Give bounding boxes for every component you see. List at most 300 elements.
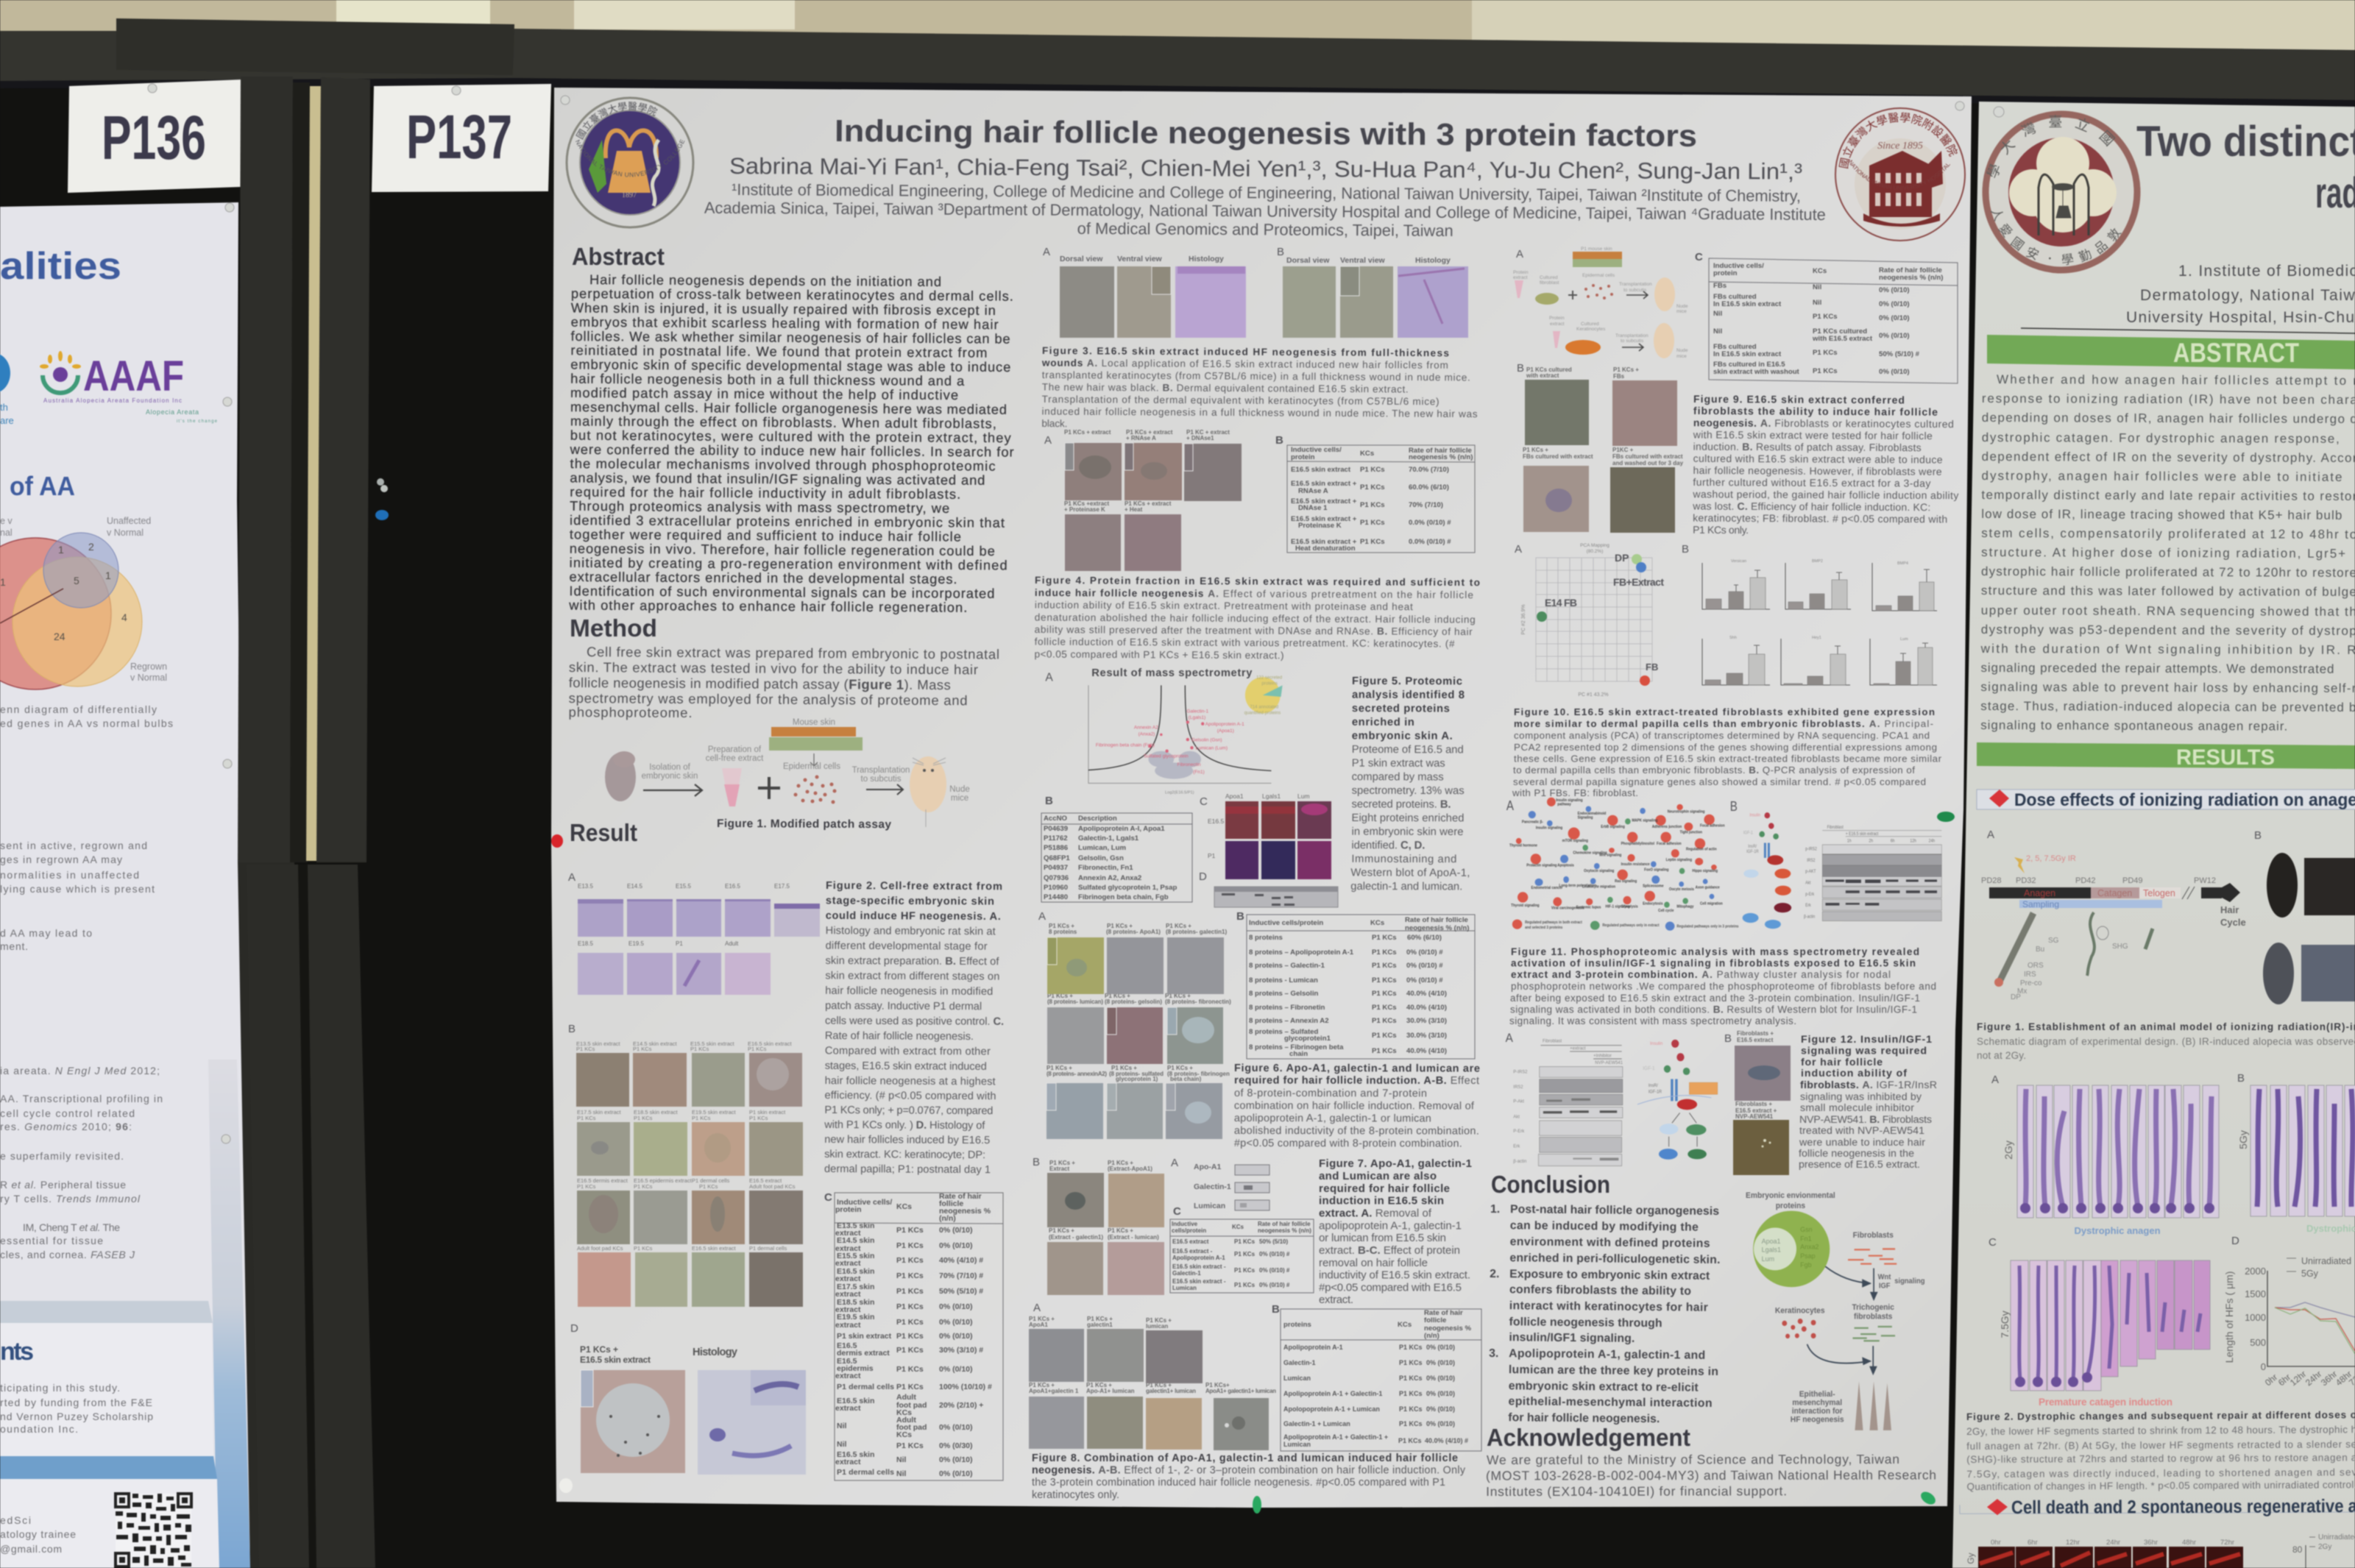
figure 7 panel C: table: E16.5 extract - [1172,1248,1213,1255]
right figure 2D: line chart: 0hr [2263,1372,2279,1388]
P137 number card: P137 [406,102,512,171]
figure 8 panel B: table: Lumican [1283,1441,1311,1448]
right figure 2D: line chart: 2000 [2245,1266,2266,1277]
figure 8 panel B: table: P1 KCs [1399,1405,1423,1413]
figure 2 caption: Figure 2. Cell-free extract from [826,880,1002,893]
figure 11 panel A: pathway cluster network: Long-term potentiation [1559,884,1596,888]
conclusion diagram: mechanism schematic: Anxa2 [1800,1243,1819,1251]
figure 11 panel A: pathway cluster network: HIF-1 signaling [1606,904,1630,909]
figure 11 panel B: signaling pathway and western blot: Erk [1805,904,1811,908]
right figure 2B: 5Gy histology strips: B [2237,1072,2245,1085]
figure 4 panel B: table: RNAse A [1298,487,1328,495]
text fragments: acknowledgements and contact [0,1382,153,1555]
text block: abstract: Through proteomics analysis with mass spectrometry, we [570,498,949,516]
right poster title fragment [2136,118,2355,217]
figure 2 panel A: histology strip: E18.5 [578,940,593,947]
figure 3: photos: Dorsal view [1060,255,1103,263]
figure 6 panel B: table: P1 KCs [1372,1017,1397,1025]
conclusion diagram: mechanism schematic: Wnt [1878,1273,1891,1282]
figure 8 panel A: photo grid: P1 KCs + [1087,1316,1113,1322]
figure 2 panel C: rate table: E13.5 skin [837,1221,874,1230]
figure 11 panel A: pathway cluster network: Cell cycle [1658,908,1674,913]
figure 2 panel B: wound photo grid: P1 KCs [634,1245,653,1252]
figure 2 panel B: wound photo grid: P1 KCs [577,1115,596,1121]
figure 12 caption: presence of E16.5 extract. [1799,1159,1920,1171]
right poster abstract text: structure. At higher dose of ionizing radiation, Lgr5+ [1981,545,2345,561]
figure 11 caption [1509,946,1936,1026]
figure 12 panel A: blot and pathway: NVP-AEW541 [1595,1060,1623,1065]
right figure 2 caption [1966,1409,2355,1492]
figure 10 panel B: bar charts: B [1682,543,1689,556]
text block: conclusion list: 2. [1490,1268,1499,1280]
figure 8 panel B: table [1272,1303,1481,1451]
figure 6 panel A: photo grid: (8 proteins- annexinA2) [1047,1071,1107,1077]
top frame bar [0,18,2355,107]
right figure 3: fluorescence image strip: 6hr [2028,1539,2038,1547]
figure 7 panel C: table: neogenesis % (n/n) [1258,1227,1311,1234]
figure 9 panel C: table: neogenesis % (n/n) [1879,274,1943,282]
text block: abstract: follicles. We ask whether similar neogenesis of hair follicles can be [571,328,1010,347]
figure 11 caption: activation of insulin/IGF-1 signaling in fibroblasts exposed to E16.5 skin [1511,958,1916,968]
right figure 2 caption: 2Gy, the lower HF segments started to shrink from 12 to 48 hours. The dystrophic h [1966,1424,2355,1437]
figure 7 panel C: table [1170,1205,1314,1293]
figure 7 panel C: table: cells/protein [1172,1227,1206,1234]
figure 12 panel B: photos: NVP-AEW541 [1735,1113,1774,1120]
figure 5 panel B: protein table: Gelsolin, Gsn [1078,854,1124,862]
figure 2 panel C: rate table: extract [835,1290,861,1299]
figure 6 panel A: photo grid: (8 proteins- galectin1) [1166,929,1227,935]
text block: conclusion list: embryonic skin extract to re-elicit [1509,1380,1699,1394]
text fragments: acknowledgements and contact: rted by funding from the F&E [0,1397,152,1408]
figure 8 panel B: table: 40.0% (4/10) # [1425,1437,1468,1444]
figure 2 panel C: rate table: Rate of hair [939,1192,982,1201]
figure 2 panel C: rate table: P1 KCs [896,1318,924,1327]
figure 11 panel A: pathway cluster network: Neurotrophin signaling [1668,809,1705,815]
figure 8 panel B: table: P1 KCs [1399,1359,1423,1366]
figure 5 caption: Proteome of E16.5 and [1352,744,1464,756]
logo: NTU college of medicine [565,96,695,230]
figure 9 caption: further cultured without E16.5 extract for a 3-day [1693,476,1930,489]
figure 11 panel A: pathway cluster network: Mitophagy [1676,904,1694,909]
figure 8 panel B: table: Apolopoprotein A-1 + Lumican [1283,1405,1380,1413]
figure 11 panel B: signaling pathway and western blot: 1h [1847,839,1852,844]
figure 2 caption: skin extract from different stages on [825,970,999,983]
right figure 2D: line chart: 36hr [2319,1369,2339,1388]
figure 5 panel A: volcano plot and pie: proteins [1261,681,1278,687]
right poster abstract text: low dose of IR, lineage tracing showed that K5+ hair bulb [1981,507,2342,522]
figure 9 panel A: patch assay schematic: Transplantation [1615,333,1648,338]
logo: AAAF: AAAF [83,352,184,400]
right figure 1: experimental design: Cycle [2220,917,2246,928]
text block: abstract: mainly through the effect on fibroblasts. When adult fibroblasts, [570,413,996,431]
figure 7 panel B: photos: P1 KCs + [1049,1227,1074,1234]
figure 4 panel A: photos: P1 KCs + extract [1125,500,1172,507]
figure 9 panel A: patch assay schematic: to subcutis [1623,288,1647,293]
figure 2 panel B: wound photo grid: E16.5 skin extract [748,1040,793,1047]
figure 11 panel A: pathway cluster network: Signaling [1578,815,1593,820]
right figure 1: experimental design: Catagen [2097,888,2132,898]
text block: abstract: hair follicle neogenesis both in a full thickness wound and a [570,371,965,389]
figure 5 panel B: protein table: Sulfated glycoprotein 1, Psap [1078,884,1177,892]
logo: National Taiwan University [1981,110,2142,274]
figure 2 panel B: wound photo grid: P1 KCs [634,1183,653,1190]
figure 11 panel B: signaling pathway and western blot: + E16.5 skin extract [1846,832,1879,837]
figure 5 panel B: protein table: B [1045,795,1053,807]
figure 12 panel A: blot and pathway: β-actin [1513,1159,1527,1164]
right figure 2D: line chart: 0 [2261,1361,2266,1372]
figure 5 panel B: protein table: P04639 [1044,825,1068,833]
figure 7 panel C: table: Inductive [1172,1221,1198,1227]
figure 3: photos: Ventral view [1117,255,1163,263]
right figure 2D: line chart: Unirradiated [2301,1256,2351,1266]
figure 2 panel C: rate table: E14.5 skin [837,1236,874,1245]
figure 5 panel A: volcano plot and pie: Fibronectin [1178,762,1201,767]
figure 3: photos: Ventral view [1340,256,1386,265]
right figure 2D: line chart: 24hr [2303,1369,2323,1388]
text block: abstract: embryonic skin of specific developmental stage was able to induce [570,356,1010,375]
figure 4 panel B: table [1275,434,1475,553]
figure 11 panel B: signaling pathway and western blot: 12h [1910,839,1916,844]
figure 5 caption: Eight proteins enriched [1352,812,1465,824]
figure 5 caption: Immunostaining and [1351,854,1456,865]
figure 2 panel B: wound photo grid: P1 skin extract [749,1109,786,1115]
right figure 2D: line chart: 48hr [2334,1369,2354,1388]
figure 6 panel A: photo grid: 8 proteins [1049,929,1077,935]
figure 12 panel A: blot and pathway: +extract [1570,1046,1586,1051]
figure 4 caption: p<0.05 compared with P1 KCs + E16.5 skin extract.) [1034,648,1284,661]
figure 6 caption: of 8-protein-combination and 7-protein [1234,1088,1427,1099]
text block: acknowledgement: Institutes (EX104-10410EI) for financial support. [1486,1483,1787,1499]
figure 5 caption: embryonic skin A. [1352,730,1453,742]
heading: acknowledgements fragment: nts [0,1338,34,1366]
figure 8 panel B: table: 0% (0/10) [1426,1359,1455,1366]
right figure 2C: 7.5Gy histology strips: C [1989,1236,1997,1249]
P136 number card: P136 [102,103,206,172]
right figure 2D: line chart: D [2231,1235,2239,1247]
figure 6 panel B: table: 8 proteins – Fibronetin [1249,1004,1325,1012]
figure 2 caption: could induce HF neogenesis. A. [826,910,1001,923]
figure 4 panel B: table: P1 KCs [1360,501,1385,509]
authors: Sabrina Mai-Yi Fan¹, Chia-Feng Tsai², Chien-Mei Yen¹,³, Su-Hua Pan⁴, Yu-Ju Chen², Sung-Jan Lin¹,³ [729,153,1802,185]
figure 2 panel A: histology strip: E15.5 [676,883,691,890]
right figure 1: experimental design: IRS [2024,971,2036,979]
right poster abstract banner [1987,335,2355,369]
text block: abstract: reinitiated in postnatal life. We found that protein extract from [570,342,988,361]
figure 9 panel B: photos: P1 KCs cultured [1526,366,1572,373]
figure 11 panel A: pathway cluster network: Axon guidance [1696,885,1720,890]
text block: acknowledgement [1486,1452,1936,1499]
figure 6 panel B: table: 8 proteins – Gelsolin [1249,990,1319,998]
figure 9 panel A: patch assay schematic: P1 mouse skin [1581,246,1612,252]
figure 11 panel B: signaling pathway and western blot: Akt [1805,881,1811,886]
figure 2 panel B: wound photo grid: E15.5 skin extract [690,1040,735,1047]
figure 6 panel A: photo grid: glycoprotein 1) [1116,1076,1158,1082]
chart: venn diagram: 24 [54,631,65,642]
figure 5 caption: Western blot of ApoA-1, [1350,867,1470,879]
P137 number card [372,84,551,192]
caption: figure 1: Figure 1. Modified patch assay [717,817,891,831]
right figure 2C: 7.5Gy histology strips: Premature catagen induction [2039,1397,2172,1408]
right figure 1: experimental design: SHG [2112,943,2128,951]
figure 2 panel B: wound photo grid: P1 KCs [748,1046,767,1052]
figure 8 panel B: table: follicle [1424,1316,1446,1324]
text fragments: venn caption and conclusions: cell cycle control related [0,1107,135,1119]
right poster abstract text: dystrophy, anagen hair follicles were able to initiate [1981,469,2342,484]
text block: abstract: but not keratinocytes, were cultured with the protein extract, they [570,428,1012,445]
figure 3: photos: Histology [1415,256,1451,265]
figure 2 panel C: rate table: 0% (0/10) [939,1365,973,1374]
figure 2 caption: skin extract. KC: keratinocyte; DP: [824,1149,985,1161]
text block: abstract: mesenchymal cells. Hair follicle organogenesis here was mediated [570,399,1007,417]
figure 11 panel B: signaling pathway and western blot: 2h [1869,839,1873,844]
figure 9 panel C: table: P1 KCs [1813,313,1838,321]
figure 6 panel B: table: 8 proteins – Galectin-1 [1249,962,1325,970]
figure 3 caption: transplanted keratinocytes (from C57BL/6 mice) in a full thickness wound in nude mice. [1042,369,1470,383]
icon: epidermal cells [793,776,836,803]
figure 6 panel B: table: 8 proteins [1249,934,1283,942]
figure 12 panel B: photos: Fibroblasts + [1737,1030,1774,1037]
figure 7 caption: apolipoprotein A-1, galectin-1 [1319,1220,1462,1232]
figure 7 panel C: table: E16.5 skin extract - [1172,1278,1226,1285]
figure 6 panel B: table: 8 proteins - Lumican [1249,976,1318,985]
figure 2 caption: efficiency. (# p<0.05 compared with [824,1090,996,1102]
figure 4 panel A: photos: + DNAse1 [1186,435,1214,441]
figure 9 panel A: patch assay schematic: Cultured [1581,322,1599,327]
figure 2 caption: different developmental stage for [826,940,988,953]
right figure 1: experimental design: PW12 [2194,876,2216,885]
figure 9 caption: hair follicle neogenesis. However, if fibroblasts were [1693,464,1942,478]
right figure 1 caption: Figure 1. Establishment of an animal model of ionizing radiation(IR)-in [1977,1021,2355,1032]
text block: abstract: identified 3 extracellular proteins enriched in embryonic skin that [570,512,1005,531]
figure 2 panel D: hair follicle photo and histology: E16.5 skin extract [580,1355,651,1365]
figure 11 panel A: pathway cluster network: Thyroid signaling [1511,904,1540,908]
figure 2 panel C: rate table: neogenesis % [939,1207,991,1216]
text block: abstract: embryos that exhibit scarless healing with formation of new hair [571,314,999,332]
figure 11 panel B: signaling pathway and western blot: 24h [1929,839,1935,844]
figure 5 panels C and D: immunostaining and western blot: Apoa1 [1225,792,1244,800]
right figure 1: experimental design: A [1987,829,1994,841]
figure 2 panel C: rate table: protein [835,1205,862,1214]
right figure 2A: 2Gy histology strips: 2Gy [2002,1140,2014,1160]
right poster abstract text: dystrophy was p53-dependent and the severity of dystrop [1981,622,2355,638]
figure 2 caption: dermal papilla; P1: postnatal day 1 [824,1163,991,1176]
figure 9 panel A: patch assay schematic: fibroblast [1540,280,1559,285]
figure 2 panel C: rate table: (n/n) [939,1214,956,1223]
figure 4 panel B: table: E16.5 skin extract + [1291,480,1357,488]
figure 9 panel C: table: 0% (0/10) [1879,314,1910,322]
figure 11 panel A: pathway cluster network: Hippo signaling [1692,869,1718,873]
text block: acknowledgement: We are grateful to the Ministry of Science and Technology, Taiwan [1487,1452,1899,1467]
figure 4 panel B: table: E16.5 skin extract + [1291,497,1357,505]
figure 4 panel B: table: 60.0% (6/10) [1409,483,1449,492]
figure 5 panel A: volcano plot and pie: Result of mass spectrometry [1091,667,1253,679]
figure 6 panel B: table: Rate of hair follicle [1405,916,1468,924]
figure 4 panel B: table: P1 KCs [1360,538,1385,546]
text block: conclusion list: enriched in peri-folliculogenetic skin. [1509,1252,1720,1266]
figure 10 panel B: bar charts: Hey1 [1812,636,1821,640]
figure 2 panel C: rate table: 0% (0/10) [939,1469,973,1478]
figure 5 panels C and D: immunostaining and western blot: Lgals1 [1262,792,1281,800]
figure 7 caption: required for hair follicle [1319,1182,1450,1195]
figure 11 panel A: pathway cluster network: ErbB signaling [1601,825,1625,829]
figure 9 panel A: patch assay schematic: Keratinocytes [1576,327,1606,332]
figure 4 panel B: table: protein [1291,453,1315,461]
right figure 2D: line chart: 1500 [2245,1288,2266,1299]
figure 5 caption: secreted proteins [1352,703,1450,715]
figure 5 panels C and D: immunostaining and western blot [1199,792,1338,907]
figure 7 panel C: table: 0% (0/10) # [1259,1251,1290,1257]
figure 8 panel A: photo grid: P1 KCs + [1086,1382,1112,1388]
heading fragment: alities [0,245,121,288]
figure 5 panel A: volcano plot and pie: Apolipoprotein A-1 [1205,722,1244,727]
figure 7 panel C: table: Rate of hair follicle [1258,1221,1311,1227]
figure 7 panel C: table: KCs [1232,1224,1244,1230]
right poster abstract text: stem cells, compensatorily proliferated at 12 to 48hr to [1981,526,2355,542]
figure 6 panel A: photo grid: (8 proteins- lumican) [1047,998,1103,1005]
conclusion diagram: mechanism schematic: Keratinocytes [1775,1306,1825,1316]
figure 11 panel B: signaling pathway and western blot: IGF-1R [1746,850,1759,854]
figure 9 panel C: table: FBs [1713,282,1727,290]
figure 11 panel A: pathway cluster network: MAPK signaling [1632,818,1657,823]
figure 2 panel C: rate table: 40% (4/10) # [939,1256,983,1265]
figure 2 panel B: wound photo grid: E16.5 extract [749,1177,782,1184]
figure 6 panel B: table: 0% (0/10) # [1406,948,1443,957]
figure 2 panel B: wound photo grid: E16.5 skin extract [692,1245,737,1252]
figure 10 caption: several dermal papilla signature genes also showed a similar trend. # p<0.05 compared [1513,776,1926,787]
figure 8 panel A: photo grid: P1 KCs+ [1205,1382,1230,1388]
figure 10 caption [1512,706,1942,798]
figure 5 panel B: protein table: Fibronectin, Fn1 [1078,864,1133,872]
figure 2 panel C: rate table: P1 skin extract [837,1332,892,1341]
figure 2 panel C: rate table: P1 KCs [896,1256,924,1265]
text block: conclusion list: insulin/IGF1 signaling. [1509,1331,1635,1345]
icon: plus [758,777,780,799]
right poster abstract text: depending on doses of IR, anagen hair follicles undergo d [1982,411,2355,426]
figure 4 caption: Figure 4. Protein fraction in E16.5 skin extract was required and sufficient to [1035,575,1480,588]
figure 6 panel B: table: 30.0% (3/10) [1406,1017,1447,1025]
text block: method [568,644,999,723]
figure 6 panel A: photo grid: (8 proteins- fibrinogen [1167,1071,1230,1077]
right figure 1: experimental design: Hair [2220,904,2239,915]
figure 11 panel A: pathway cluster network: Insulin resistance [1621,862,1650,867]
wall background [0,0,2355,103]
figure 10 panel A: PCA scatter: PC #2 36.9% [1521,604,1526,635]
right figure 2D: line chart: 12hr [2288,1369,2308,1388]
figure 8 panel B: table: Galectin-1 [1283,1359,1316,1366]
right figure 3: fluorescence image strip [1966,1539,2243,1568]
right figure 3: fluorescence image strip: 0hr [1991,1539,2001,1547]
text fragments: venn caption and conclusions: ges in regrown AA may [0,854,122,865]
figure 9 panel C: table: Inductive cells/ [1713,262,1764,270]
figure 2 panel C: rate table: KCs [896,1430,912,1439]
figure 4 panel B: table: E16.5 skin extract [1291,466,1351,474]
arrow: transplantation [852,766,910,795]
figure 2 panel C: rate table: P1 KCs [896,1302,924,1311]
title: Inducing hair follicle neogenesis with 3 protein factors [835,113,1697,153]
figure 11 panel B: signaling pathway and western blot: 6h [1891,839,1895,844]
figure 2 caption [824,880,1005,1176]
right figure 2A: 2Gy histology strips: Dystrophic anagen [2074,1225,2161,1236]
figure 7 panel C: table: P1 KCs [1234,1251,1256,1257]
figure 10 caption: more similar to dermal papilla cells than embryonic fibroblasts. A. Principal- [1514,718,1933,729]
right poster abstract text: dystrophic catagen. For dystrophic anagen response, [1982,430,2340,446]
figure 9 panel C: table: skin extract with washout [1713,368,1800,376]
figure 4 panel B: table: 0.0% (0/10) # [1409,538,1451,546]
figure 11 caption: extract and 3-protein combination. A. Pathway cluster analysis for nodal [1511,969,1891,980]
figure 10 panel B: bar charts: BMP2 [1812,559,1823,564]
figure 4 panel A: photos: + RNAse A [1126,435,1156,441]
conclusion diagram: mechanism schematic: Fibroblasts [1853,1231,1894,1240]
heading: Abstract: Abstract [572,243,665,270]
figure 2 panel C: rate table: P1 dermal cells [837,1468,894,1477]
figure 2 panel C: rate table: 0% (0/10) [939,1332,973,1341]
figure 4 panel A: photos: P1 KCs +extract [1064,500,1109,507]
figure 5 caption: secreted proteins. B. [1352,798,1451,811]
figure 10 panel A: PCA scatter: FB+Extract [1613,576,1664,588]
text block: conclusion list: Post-natal hair follicle organogenesis [1510,1203,1719,1218]
figure 7 caption: inductivity of E16.5 skin extract. [1319,1269,1470,1282]
figure 9 panel C: table: P1 KCs [1813,349,1838,357]
figure 2 panel C: rate table: 0% (0/30) [939,1441,973,1450]
figure 7 caption: extract. A. Removal of [1319,1207,1432,1220]
figure 5 caption: Figure 5. Proteomic [1352,675,1462,687]
text block: abstract: together were required and sufficient to induce hair follicle [570,526,961,544]
figure 8 panel A: photo grid: ApoA1 [1029,1322,1048,1328]
text block: abstract: neogenesis in vivo. Therefore, hair follicle regeneration could be [570,541,995,558]
right poster results banner: RESULTS [2176,745,2275,770]
figure 5 panel B: protein table: AccNO [1044,815,1068,823]
figure 11 panel A: pathway cluster network: Regulated pathways only in extract [1602,923,1660,928]
figure 9 caption: with E16.5 skin extract were tested for hair follicle [1693,428,1933,441]
conclusion diagram: mechanism schematic: Apoa1 [1762,1238,1781,1245]
figure 8 panel B: table: (n/n) [1424,1332,1439,1340]
right figure 2D: line chart: 5Gy [2301,1269,2319,1279]
figure 2 panel C: rate table: extract [835,1305,861,1314]
figure 6 panel B: table: P1 KCs [1372,1004,1397,1012]
icon: nude mouse: Nude [949,785,970,794]
figure 2 panel C: rate table: extract [835,1404,861,1413]
figure 2 panel C: rate table: E16.5 skin [837,1397,874,1405]
P136 number card [68,79,242,193]
figure 9 panel B: photos: P1 KCs + [1523,447,1548,453]
figure 3: photos: Dorsal view [1286,256,1330,265]
conclusion diagram: mechanism schematic: fibroblasts [1854,1312,1892,1322]
figure 9 panel C: table: Nil [1813,283,1821,291]
right figure 2 caption: full anagen at 72hr. (B) At 5Gy, the lower HF segments retracted to a slender se [1966,1438,2355,1452]
right figure 1B: mice photos [2254,829,2355,1004]
figure 9 panel B: photos [1517,362,1684,533]
right poster abstract text: signaling to enhance spontaneous anagen repair. [1980,718,2287,734]
figure 9 caption: Figure 9. E16.5 skin extract conferred [1693,393,1905,406]
text block: conclusion list: 3. [1489,1347,1498,1360]
figure 9 panel C: table: C [1695,251,1703,263]
figure 4 caption [1034,575,1480,662]
text block: method: spectrometry was employed for the analysis of proteome and [569,690,968,708]
figure 2 panel C: rate table: 70% (7/10) # [939,1271,983,1280]
figure 9 panel C: table: In E16.5 skin extract [1713,300,1782,308]
figure 2 panel C: rate table: Inductive cells/ [837,1198,892,1207]
figure 11 panel A: pathway cluster network [1506,798,1739,931]
text fragments: venn caption and conclusions: IM, Cheng T et al. The [23,1221,120,1233]
figure 2 panel C: rate table: 50% (5/10) # [939,1287,983,1296]
figure 4 panel B: table: KCs [1360,450,1374,458]
text block: conclusion list [1488,1203,1721,1426]
figure 7 panel B: photos: (Extract - lumican) [1108,1234,1159,1241]
figure 2 panel A: histology strip: E19.5 [628,940,644,947]
text block: abstract: the molecular mechanisms involved through phosphoproteomic [570,455,996,474]
figure 9 panel A: patch assay schematic: Transplantation [1619,282,1652,287]
icon: cell-free extract tube [706,745,764,806]
